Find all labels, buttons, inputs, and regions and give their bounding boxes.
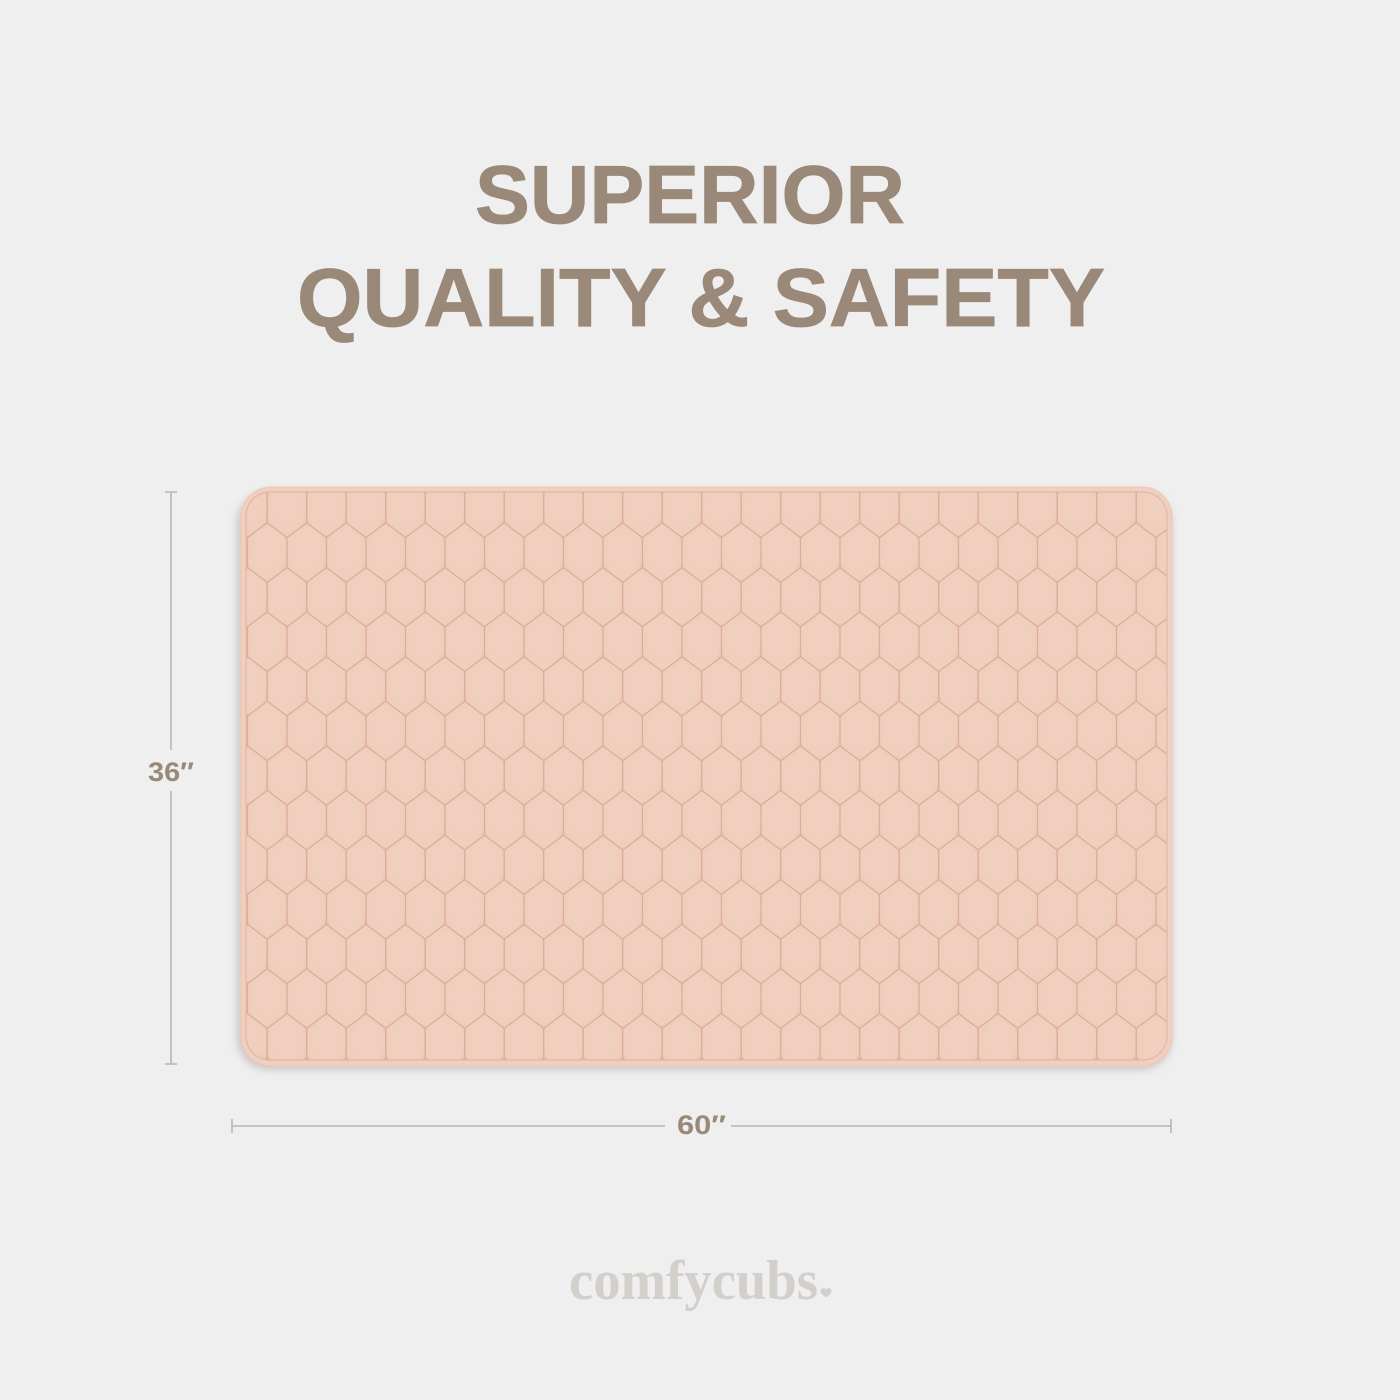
brand logo — [569, 1250, 832, 1312]
height label: 36″ — [148, 757, 194, 787]
title line: superior: SUPERIOR — [475, 148, 905, 241]
title line: quality and safety: QUALITY & SAFETY — [297, 251, 1105, 344]
mat piping edge — [241, 487, 1172, 1066]
infographic canvas — [148, 165, 1176, 1311]
width label: 60″ — [677, 1110, 726, 1140]
width dimension — [232, 1110, 1171, 1140]
brand wordmark: comfycubs — [569, 1250, 818, 1312]
title — [297, 148, 1105, 344]
height line — [165, 492, 177, 1064]
mat shadow — [237, 491, 1172, 1070]
height dimension — [148, 492, 194, 1064]
honeycomb quilting — [246, 492, 1167, 1060]
icon: heart — [820, 1288, 832, 1298]
quilted mat — [237, 487, 1172, 1070]
width line — [232, 1119, 1171, 1133]
inner seam — [246, 492, 1167, 1060]
